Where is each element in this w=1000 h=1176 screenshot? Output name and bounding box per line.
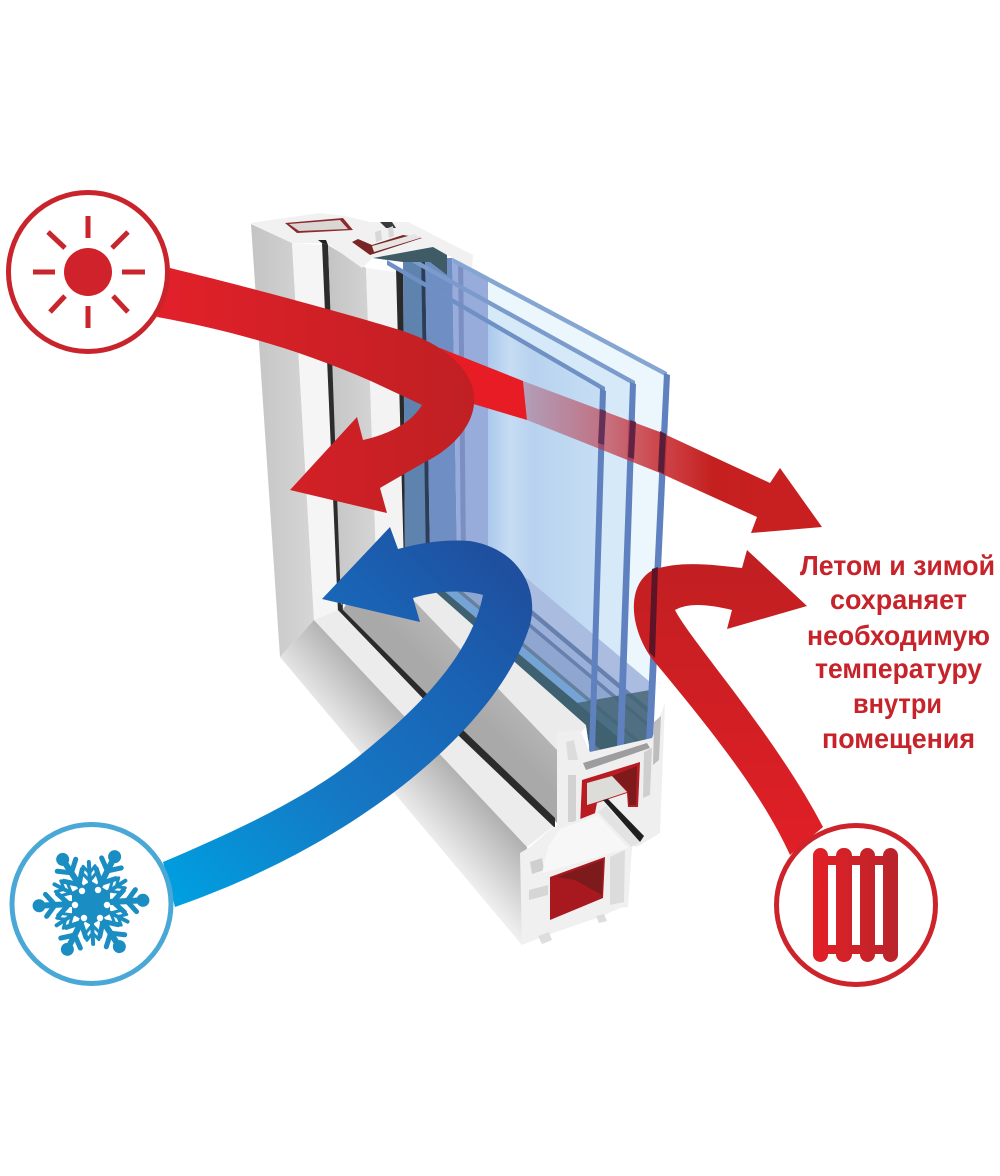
arrow: sun heat entering glass	[440, 348, 527, 420]
arrow: cold reflected	[163, 527, 532, 907]
window	[250, 213, 670, 945]
glass unit	[387, 250, 670, 790]
caption: помещения	[822, 723, 975, 754]
top frame section	[250, 213, 473, 275]
caption: необходимую	[807, 620, 990, 651]
caption: Летом и зимой	[800, 550, 995, 581]
infographic	[6, 190, 994, 987]
caption: температуру	[815, 653, 982, 684]
arrow: sun heat reflected	[157, 268, 474, 513]
sash profile section	[557, 703, 665, 848]
arrow: sun heat passing through glass	[523, 381, 822, 533]
icon: snowflake	[12, 824, 171, 984]
frame profile section	[520, 812, 632, 945]
frame bottom rail	[280, 561, 592, 945]
caption: сохраняет	[830, 584, 967, 615]
icon: radiator	[776, 826, 936, 984]
frame left jamb	[251, 224, 410, 657]
arrow: radiator heat retained	[634, 550, 823, 855]
caption: внутри	[853, 688, 942, 719]
icon: sun	[8, 192, 168, 352]
caption	[800, 550, 995, 754]
